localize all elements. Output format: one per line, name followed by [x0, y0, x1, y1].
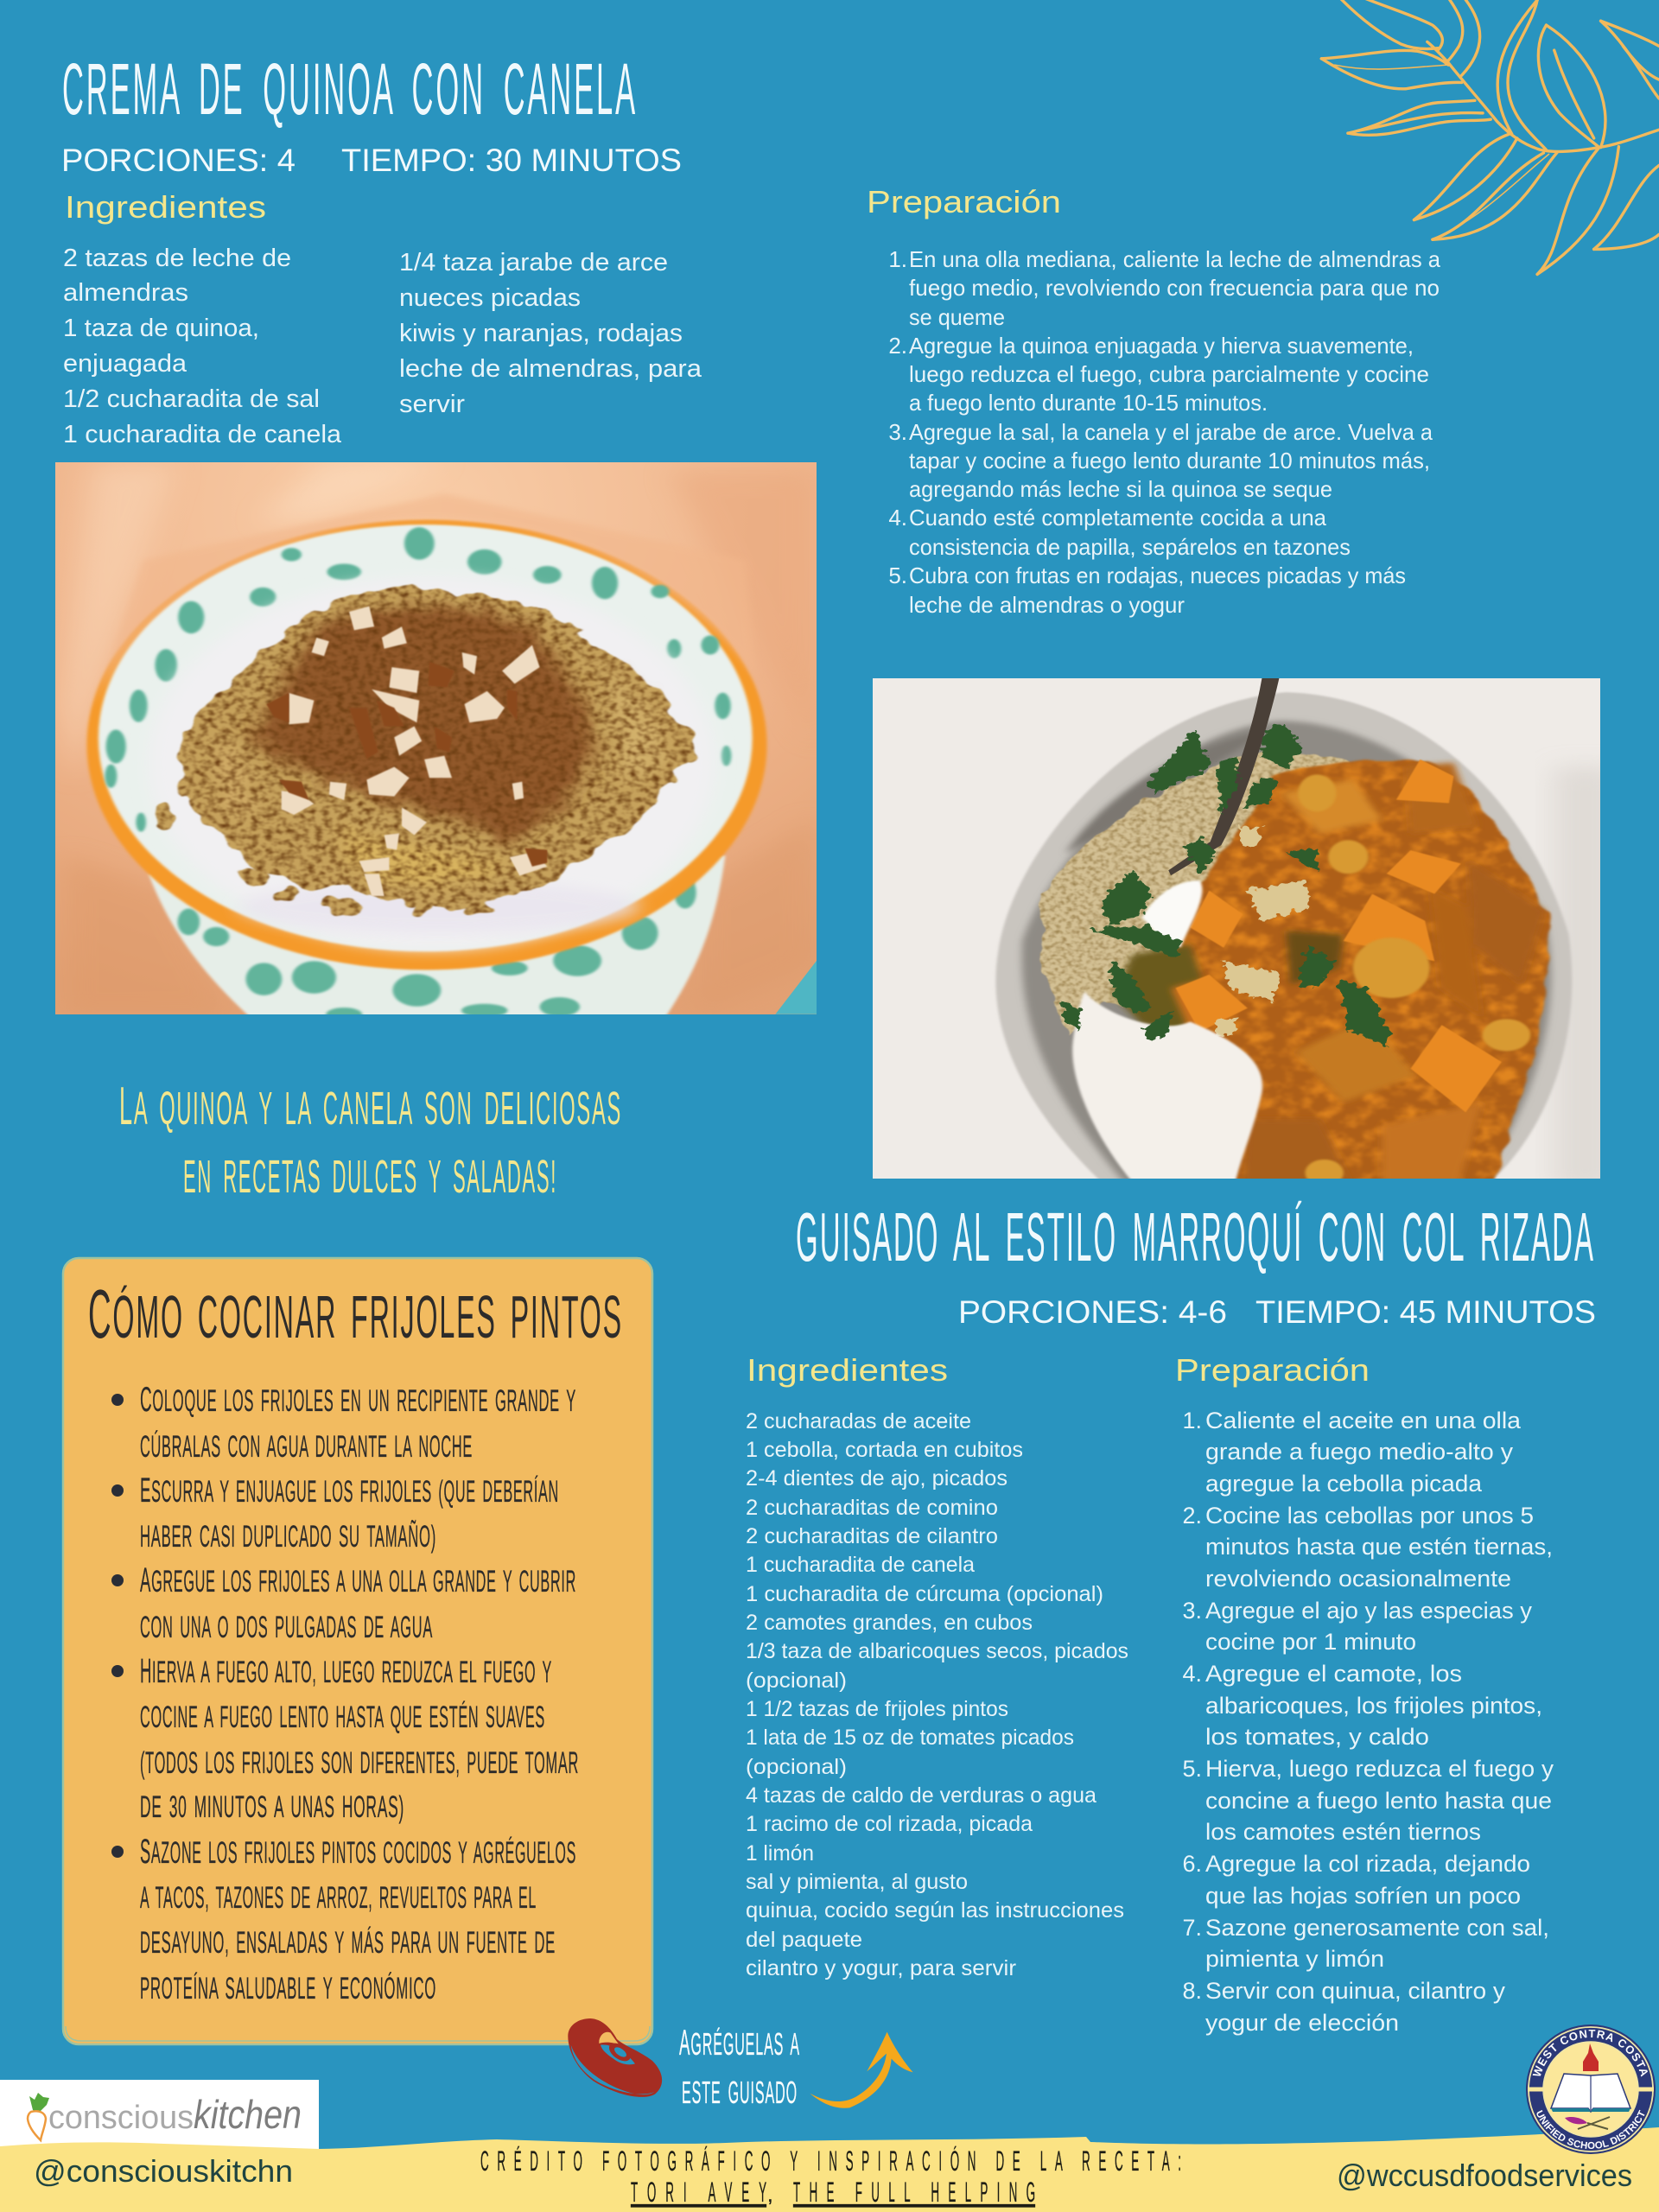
herbs [1060, 722, 1391, 1048]
preparation steps: concine a fuego lento hasta que [1205, 1788, 1552, 1814]
ingredient list: 1 1/2 tazas de frijoles pintos [746, 1697, 1008, 1721]
recipe 2 servings: PORCIONES: 4-6 [958, 1294, 1227, 1330]
spoon [1168, 678, 1279, 875]
ingredient list: 2 cucharaditas de cilantro [746, 1524, 998, 1548]
preparation numbered steps: 2. [888, 333, 907, 359]
milk [149, 576, 715, 950]
preparation steps: Hierva, luego reduzca el fuego y [1205, 1756, 1554, 1782]
infographic canvas: LA QUINOA Y LA CANELA SON DELICIOSAS [119, 1077, 622, 1136]
preparation steps: 2. [1182, 1503, 1202, 1529]
photo credit: CRÉDITO FOTOGRÁFICO Y INSPIRACIÓN DE LA RECETA: [480, 2147, 1181, 2177]
logo: white box [0, 2080, 319, 2151]
preparation steps: 4. [1182, 1661, 1202, 1687]
photo: Moroccan stew bowl [864, 665, 1617, 1193]
quinoa mound [151, 588, 696, 918]
ingredient list: 1 cucharadita de canela [746, 1553, 975, 1577]
bowl interior [99, 524, 753, 951]
recipe 2 preparation [1175, 1352, 1554, 2036]
orange rim [86, 519, 767, 969]
recipe 2 header [796, 1198, 1596, 1330]
preparation heading: Preparación [1175, 1352, 1370, 1388]
recipe 1 preparation [867, 184, 1441, 618]
handle: wccusdfoodservices: @wccusdfoodservices [1337, 2158, 1632, 2193]
logo wordmark: conscious [48, 2100, 194, 2136]
seal lettering: WEST CONTRA COSTA [1533, 2030, 1648, 2077]
seal: West Contra Costa USD [1526, 2024, 1656, 2154]
panel: how to cook pinto beans: SAZONE LOS FRIJOLES PINTOS COCIDOS Y AGRÉGUELOS [140, 1833, 576, 1871]
logo: conscious kitchen [28, 2092, 302, 2140]
preparation numbered steps: agregando más leche si la quinoa se seque [909, 476, 1332, 502]
callout: add to this stew [679, 2022, 800, 2110]
bullet list: A TACOS, TAZONES DE ARROZ, REVUELTOS PARA EL [140, 1881, 537, 1915]
ingredients column 1: 1 taza de quinoa, [63, 315, 259, 342]
preparation steps: 1. [1182, 1408, 1202, 1433]
preparation steps: los camotes estén tiernos [1205, 1819, 1481, 1845]
bullet list: PROTEÍNA SALUDABLE Y ECONÓMICO [140, 1972, 436, 2005]
preparation steps: Servir con quinua, cilantro y [1205, 1978, 1506, 2004]
ingredient list: 2-4 dientes de ajo, picados [746, 1466, 1007, 1491]
preparation steps: 6. [1182, 1851, 1202, 1877]
ingredient list: quinua, cocido según las instrucciones [746, 1898, 1124, 1923]
bowl exterior [149, 855, 725, 1026]
ingredient list: sal y pimienta, al gusto [746, 1870, 968, 1894]
ingredient list: del paquete [746, 1928, 862, 1952]
preparation steps: los tomates, y caldo [1205, 1724, 1429, 1750]
preparation steps: agregue la cebolla picada [1205, 1471, 1483, 1497]
preparation numbered steps: fuego medio, revolviendo con frecuencia para que no [909, 275, 1440, 301]
preparation steps: yogur de elección [1205, 2010, 1399, 2036]
preparation steps: que las hojas sofríen un poco [1205, 1883, 1521, 1909]
preparation steps: minutos hasta que estén tiernas, [1205, 1534, 1553, 1560]
ingredient list: 2 cucharadas de aceite [746, 1409, 971, 1433]
bullet list: COCINE A FUEGO LENTO HASTA QUE ESTÉN SUAVES [140, 1700, 545, 1734]
ingredients column 2: nueces picadas [399, 284, 581, 312]
panel: how to cook pinto beans [63, 1258, 652, 2044]
panel: how to cook pinto beans: COLOQUE LOS FRIJOLES EN UN RECIPIENTE GRANDE Y [140, 1381, 576, 1419]
preparation numbered steps: consistencia de papilla, sepárelos en tazones [909, 534, 1351, 560]
recipe 2 ingredients [746, 1352, 1128, 1980]
bullet list: CON UNA O DOS PULGADAS DE AGUA [140, 1611, 433, 1644]
couscous bits in stew [1214, 827, 1310, 1035]
ingredient list: 4 tazas de caldo de verduras o agua [746, 1783, 1096, 1808]
preparation steps: cocine por 1 minuto [1205, 1629, 1416, 1655]
preparation steps: grande a fuego medio-alto y [1205, 1439, 1514, 1465]
ingredients column 2: kiwis y naranjas, rodajas [399, 320, 683, 347]
ingredients column 2: servir [399, 391, 465, 418]
bullet list: HABER CASI DUPLICADO SU TAMAÑO) [140, 1520, 436, 1554]
recipe 1 servings: PORCIONES: 4 [61, 143, 296, 178]
preparation numbered steps: tapar y cocine a fuego lento durante 10 minutos más, [909, 448, 1430, 474]
ingredient list: 2 cucharaditas de comino [746, 1496, 998, 1520]
preparation numbered steps: Cubra con frutas en rodajas, nueces picadas y más [909, 563, 1406, 588]
ingredient list: cilantro y yogur, para servir [746, 1956, 1016, 1980]
preparation steps: Cocine las cebollas por unos 5 [1205, 1503, 1534, 1529]
quill and pen [1565, 2117, 1587, 2124]
preparation steps: Caliente el aceite en una olla [1205, 1408, 1522, 1433]
recipe 1 time: TIEMPO: 30 MINUTOS [341, 143, 682, 178]
arrow: curved up to recipe [810, 2032, 913, 2108]
bullet list [111, 1381, 579, 2005]
preparation steps: albaricoques, los frijoles pintos, [1205, 1693, 1542, 1719]
stew [1173, 760, 1550, 1193]
handle: consciouskitchn: @consciouskitchn [34, 2153, 293, 2189]
infographic canvas: EN RECETAS DULCES Y SALADAS! [183, 1151, 557, 1203]
ingredients column 1: 1/2 cucharadita de sal [63, 385, 320, 413]
yogurt [1072, 991, 1262, 1193]
preparation steps: Agregue la col rizada, dejando [1205, 1851, 1530, 1877]
panel: how to cook pinto beans: ESCURRA Y ENJUAGUE LOS FRIJOLES (QUE DEBERÍAN [140, 1471, 559, 1510]
preparation numbered steps: 5. [888, 563, 907, 588]
preparation steps: 5. [1182, 1756, 1202, 1782]
decorative gold leaves [1321, 0, 1659, 274]
callout: quinoa and cinnamon tagline [119, 1077, 622, 1203]
ingredient list: 1 limón [746, 1841, 814, 1866]
icon: carrot [28, 2093, 49, 2140]
panel: how to cook pinto beans: (TODOS LOS FRIJOLES SON DIFERENTES, PUEDE TOMAR [140, 1746, 579, 1780]
photo credit: TORI AVEY [631, 2178, 766, 2209]
bullet list: DESAYUNO, ENSALADAS Y MÁS PARA UN FUENTE DE [140, 1926, 556, 1960]
logo: conscious kitchen: kitchen [194, 2092, 302, 2137]
ingredient list: (opcional) [746, 1755, 847, 1779]
ingredients column 1 [63, 245, 342, 448]
photo credit: , [767, 2183, 773, 2207]
bullet list: DE 30 MINUTOS A UNAS HORAS) [140, 1790, 404, 1824]
ingredient list: 1 cucharadita de cúrcuma (opcional) [746, 1582, 1103, 1606]
preparation steps: pimienta y limón [1205, 1946, 1384, 1972]
ingredient list: 2 camotes grandes, en cubos [746, 1611, 1033, 1635]
footer yellow wave [0, 2080, 1659, 2212]
preparation steps [1182, 1408, 1554, 2036]
crumbled pecans [282, 607, 547, 896]
preparation numbered steps: a fuego lento durante 10-15 minutos. [909, 390, 1268, 416]
seal: West Contra Costa USD: UNIFIED SCHOOL DISTRICT [1536, 2110, 1645, 2149]
preparation steps: 8. [1182, 1978, 1202, 2004]
ingredients column 2 [399, 249, 702, 418]
preparation steps: revolviendo ocasionalmente [1205, 1566, 1511, 1592]
preparation numbered steps: 4. [888, 505, 907, 531]
ingredient list: (opcional) [746, 1669, 847, 1693]
teal plate corner [775, 959, 818, 1014]
ingredients column 2: 1/4 taza jarabe de arce [399, 249, 668, 276]
photo credit: THE FULL HELPING [793, 2178, 1035, 2209]
preparation numbered steps: Cuando esté completamente cocida a una [909, 505, 1327, 531]
infographic canvas: CREMA DE QUINOA CON CANELA [62, 48, 638, 130]
open book [1551, 2074, 1630, 2112]
preparation heading: Preparación [867, 184, 1061, 219]
recipe 2 time: TIEMPO: 45 MINUTOS [1255, 1294, 1596, 1330]
preparation numbered steps: Agregue la sal, la canela y el jarabe de arce. Vuelva a [909, 419, 1433, 445]
infographic canvas: AGRÉGUELAS A [679, 2022, 800, 2063]
infographic canvas: ESTE GUISADO [682, 2075, 798, 2110]
preparation numbered steps: 1. [888, 246, 907, 272]
preparation numbered steps [888, 246, 1441, 618]
bullet list: CÚBRALAS CON AGUA DURANTE LA NOCHE [140, 1430, 473, 1464]
ingredients heading: Ingredientes [747, 1352, 948, 1388]
ingredient list: 1/3 taza de albaricoques secos, picados [746, 1639, 1128, 1663]
ingredients column 1: 2 tazas de leche de [63, 245, 291, 272]
bowl rim [995, 692, 1572, 1193]
bowl inner [1022, 721, 1551, 1193]
ingredients heading: Ingredientes [65, 189, 266, 225]
preparation numbered steps: se queme [909, 304, 1005, 330]
ingredient list: 1 lata de 15 oz de tomates picados [746, 1726, 1074, 1750]
preparation steps: Sazone generosamente con sal, [1205, 1915, 1549, 1941]
ingredients column 1: enjuagada [63, 350, 188, 378]
recipe 1 header and ingredients [61, 48, 702, 448]
preparation steps: Agregue el ajo y las especias y [1205, 1598, 1533, 1624]
stem tangle between yogurts [1113, 944, 1209, 1032]
ingredients column 1: almendras [63, 279, 188, 307]
preparation numbered steps: 3. [888, 419, 907, 445]
ingredient list: 1 racimo de col rizada, picada [746, 1812, 1033, 1836]
photo: quinoa porridge bowl [55, 462, 817, 1014]
preparation numbered steps: En una olla mediana, caliente la leche de almendras a [909, 246, 1441, 272]
couscous [1039, 752, 1350, 1035]
ingredients column 1: 1 cucharadita de canela [63, 421, 342, 448]
ingredient list [746, 1409, 1128, 1980]
preparation steps: 3. [1182, 1598, 1202, 1624]
schoolhouse [1583, 2044, 1599, 2071]
squash cubes [1176, 760, 1502, 1112]
panel: how to cook pinto beans: AGREGUE LOS FRIJOLES A UNA OLLA GRANDE Y CUBRIR [140, 1561, 576, 1599]
panel: how to cook pinto beans: HIERVA A FUEGO ALTO, LUEGO REDUZCA EL FUEGO Y [140, 1652, 552, 1690]
photo credit [480, 2147, 1181, 2209]
preparation steps: 7. [1182, 1915, 1202, 1941]
ingredients column 2: leche de almendras, para [399, 355, 702, 383]
preparation numbered steps: Agregue la quinoa enjuagada y hierva suavemente, [909, 333, 1414, 359]
preparation numbered steps: luego reduzca el fuego, cubra parcialmente y cocine [909, 361, 1429, 387]
icon: kidney bean [568, 2018, 662, 2097]
infographic canvas: CÓMO COCINAR FRIJOLES PINTOS [88, 1275, 623, 1352]
ingredient list: 1 cebolla, cortada en cubitos [746, 1438, 1023, 1462]
preparation steps: Agregue el camote, los [1205, 1661, 1462, 1687]
preparation numbered steps: leche de almendras o yogur [909, 592, 1185, 618]
